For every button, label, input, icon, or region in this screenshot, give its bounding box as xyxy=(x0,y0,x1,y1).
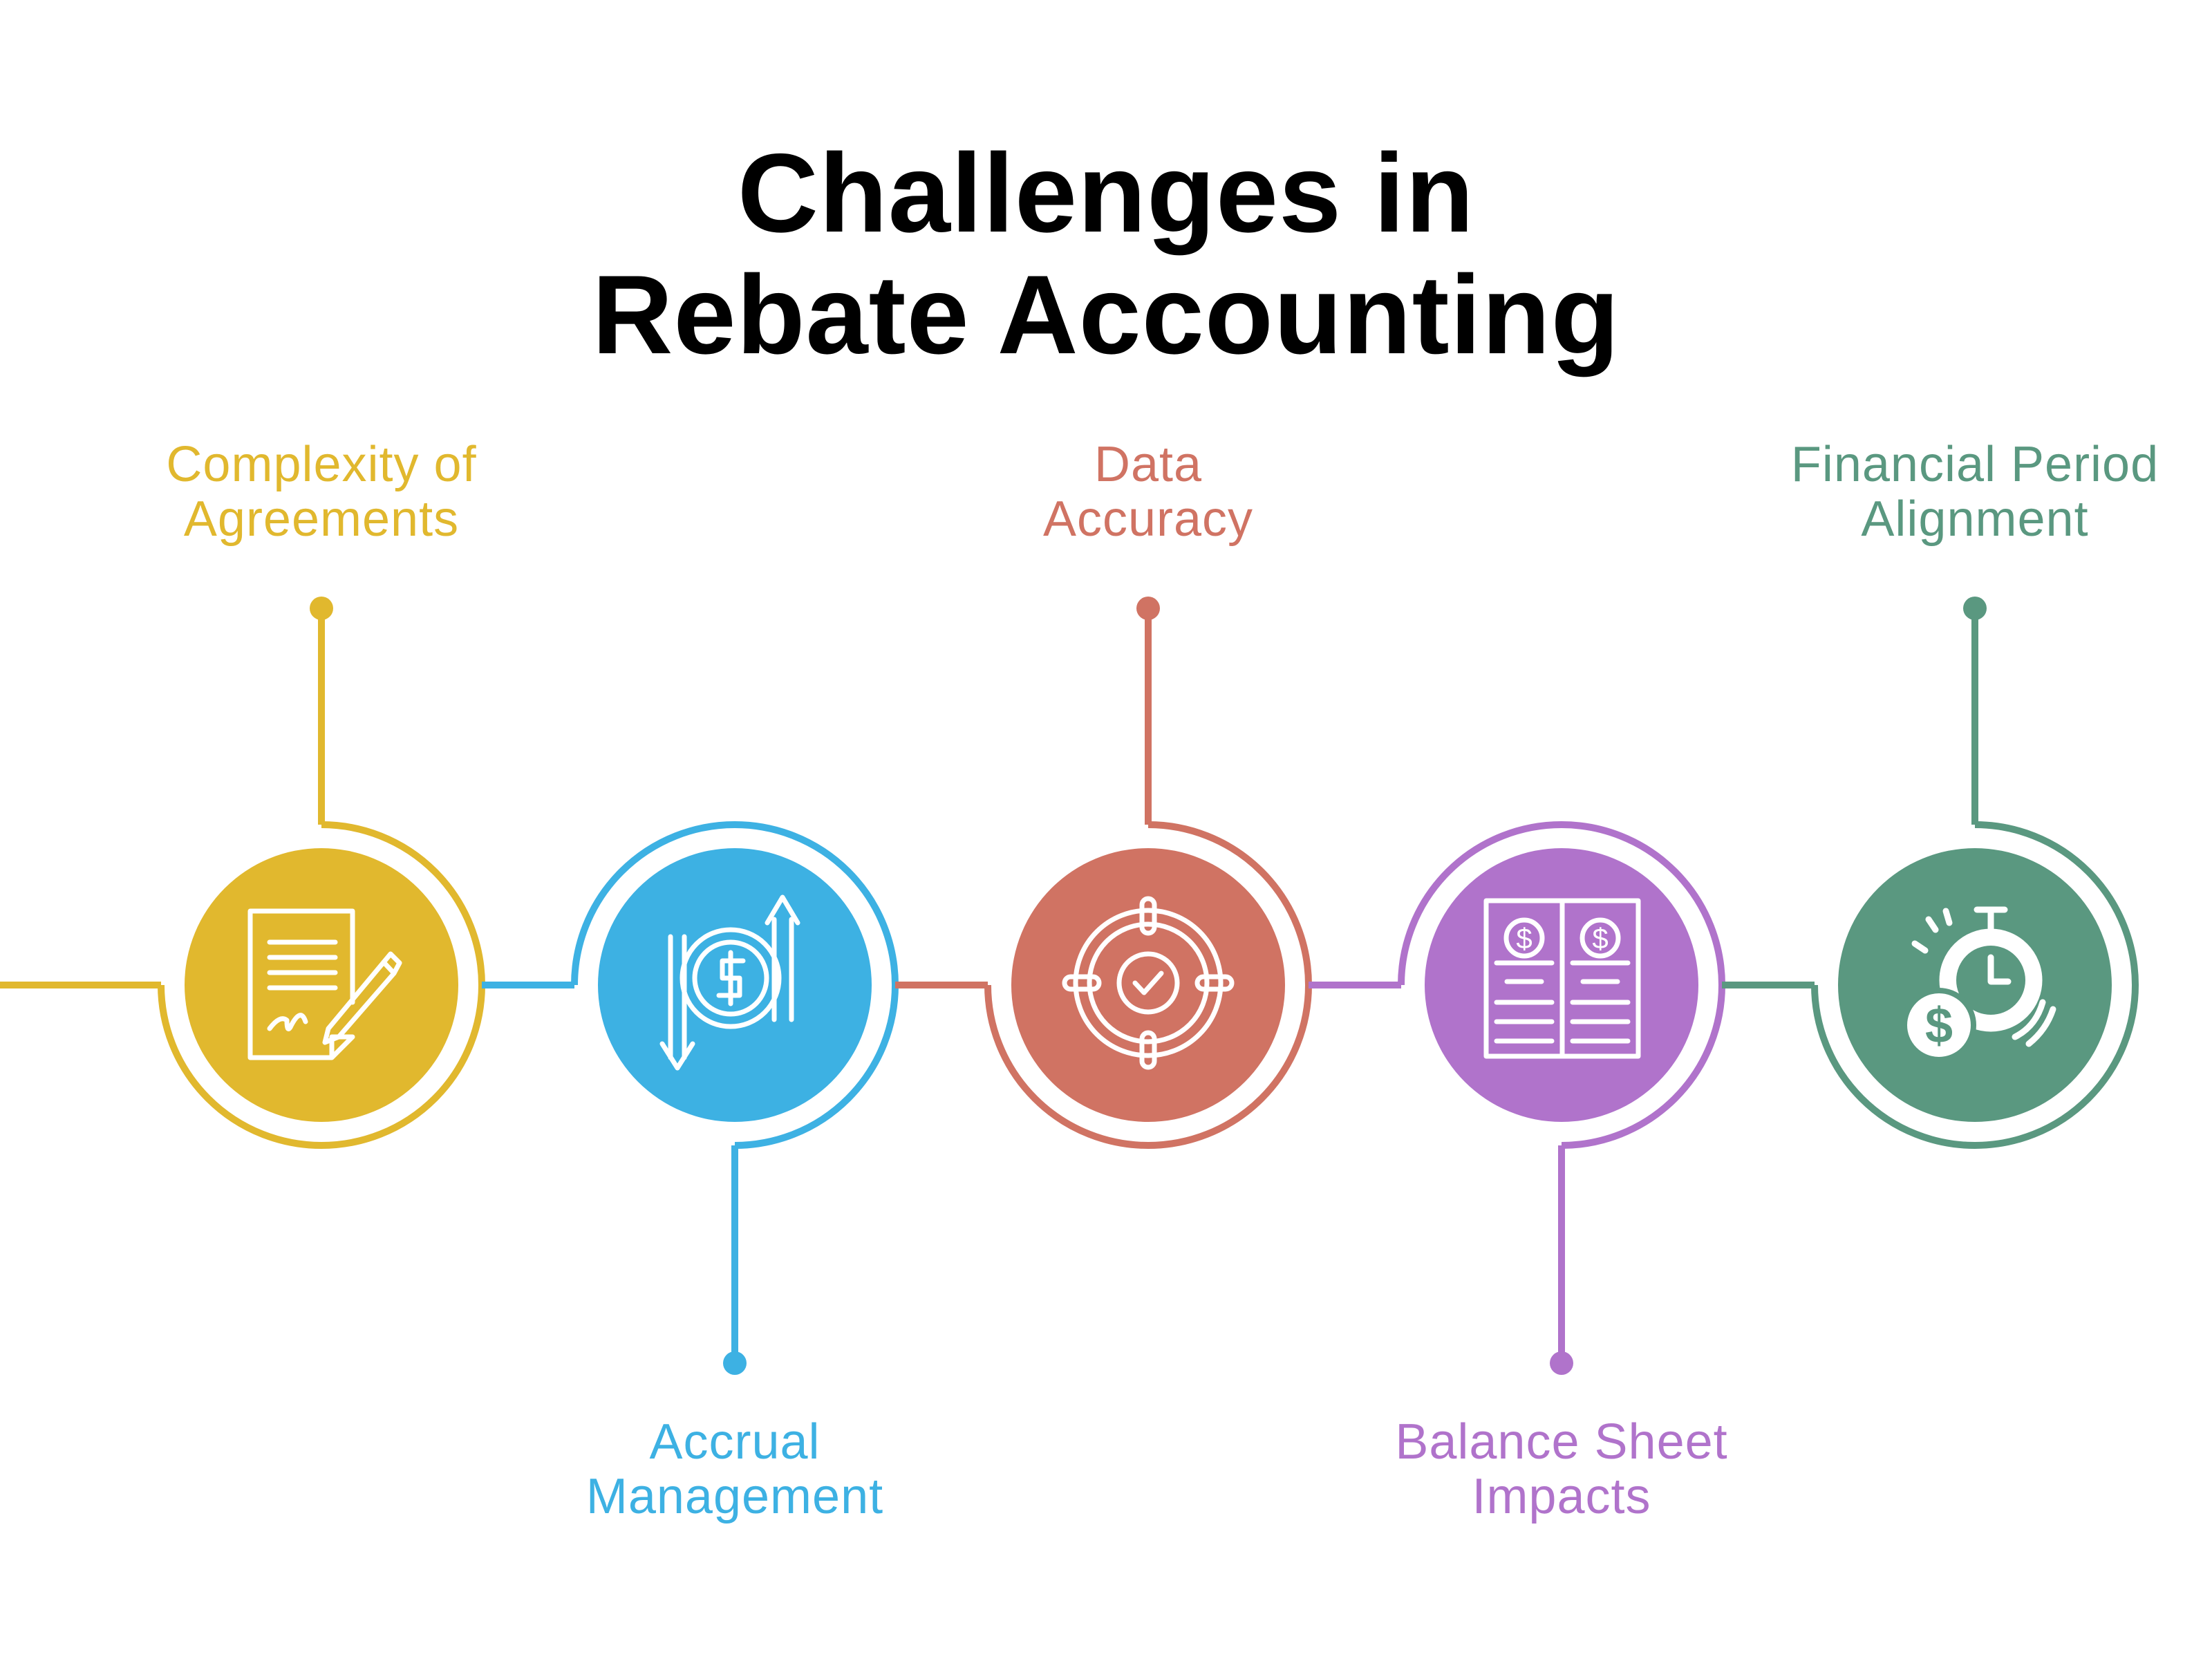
label: Financial Period Alignment: Financial Period xyxy=(1791,437,2159,492)
label: Balance Sheet Impacts: Balance Sheet xyxy=(1395,1414,1728,1470)
title: Challenges in xyxy=(738,131,1474,256)
icon: target with check xyxy=(1065,899,1232,1067)
label: Financial Period Alignment xyxy=(1791,437,2159,547)
title xyxy=(592,131,1620,377)
step 1: yellow xyxy=(0,597,482,1145)
step 4: purple xyxy=(1309,825,1722,1375)
label: Data Accuracy: Accuracy xyxy=(1043,491,1253,547)
step 2: blue xyxy=(482,825,895,1375)
label: Accrual Management: Management xyxy=(586,1469,883,1524)
title: Rebate Accounting xyxy=(592,252,1620,377)
label: Complexity of Agreements: Complexity of xyxy=(166,437,477,492)
label: Data Accuracy xyxy=(1043,437,1253,547)
label: Complexity of Agreements xyxy=(166,437,477,547)
icon: balance sheet book: $ xyxy=(1592,922,1609,955)
label: Balance Sheet Impacts: Impacts xyxy=(1472,1469,1651,1524)
icon: document with pen xyxy=(250,911,400,1058)
label: Data Accuracy: Data xyxy=(1094,437,1202,492)
icon: balance sheet book xyxy=(1486,901,1638,1056)
step 3: red xyxy=(895,597,1309,1145)
step 5: green xyxy=(1722,597,2135,1145)
icon: coin with arrows xyxy=(662,897,798,1068)
icon: stopwatch with dollar: $ xyxy=(1925,998,1953,1053)
label: Accrual Management xyxy=(586,1414,883,1524)
label: Complexity of Agreements: Agreements xyxy=(184,491,459,547)
label: Accrual Management: Accrual xyxy=(649,1414,821,1470)
label: Financial Period Alignment: Alignment xyxy=(1861,491,2089,547)
icon: balance sheet book: $ xyxy=(1516,922,1533,955)
icon: stopwatch with dollar xyxy=(1904,910,2053,1060)
label: Balance Sheet Impacts xyxy=(1395,1414,1728,1524)
